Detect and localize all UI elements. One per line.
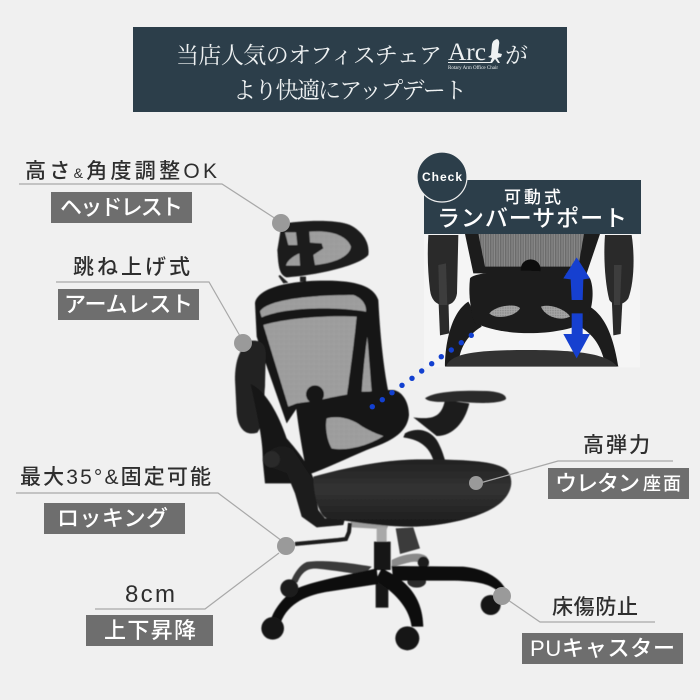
lumbar support xyxy=(296,390,409,475)
title banner: Rotary Arm Office Chair xyxy=(448,64,498,71)
backrest xyxy=(235,221,506,483)
callout: armrest: 跳ね上げ式 xyxy=(73,256,190,279)
callout: seat: 座面 xyxy=(643,474,681,494)
marker: seat xyxy=(469,476,483,490)
callout: height adjust xyxy=(86,581,213,646)
callout: seat: ウレタン xyxy=(555,471,640,496)
panel: lumbar support heading: 可動式 xyxy=(504,188,561,207)
title banner: が xyxy=(505,43,528,68)
panel: lumbar support heading: ランバーサポート xyxy=(437,205,627,231)
callout: height adjust: 上下昇降 xyxy=(104,618,196,643)
callout: armrest: アームレスト xyxy=(64,292,193,317)
chair photo xyxy=(235,221,511,650)
callout: height adjust: 8cm xyxy=(125,581,175,608)
callout: seat: 高弾力 xyxy=(583,434,650,457)
leader line: headrest xyxy=(19,184,276,219)
chair base xyxy=(261,521,505,650)
icon: double arrow xyxy=(563,257,590,358)
seat xyxy=(263,446,511,527)
badge: check: Check xyxy=(422,170,462,184)
title banner xyxy=(133,27,567,112)
marker: caster xyxy=(493,587,511,605)
callout: caster xyxy=(522,596,683,664)
leader line: armrest xyxy=(56,282,240,336)
locking lever xyxy=(295,523,350,544)
title banner: 当店人気のオフィスチェア xyxy=(176,43,442,68)
dotted connector xyxy=(370,333,474,409)
callout: caster: PUキャスター xyxy=(530,636,675,661)
marker: locking xyxy=(277,537,295,555)
callout: seat xyxy=(548,434,689,499)
leader line: caster xyxy=(508,600,655,622)
callout: armrest xyxy=(58,256,199,320)
badge: check xyxy=(417,152,467,202)
panel: lumbar support heading xyxy=(424,180,641,234)
inset: lumbar support photo xyxy=(424,234,640,367)
leader line: seat xyxy=(480,461,673,483)
callout: headrest: 高さ&角度調整OK xyxy=(25,160,217,183)
callout: headrest: ヘッドレスト xyxy=(60,195,183,220)
title banner: Arc xyxy=(448,39,486,66)
right armrest xyxy=(403,430,445,460)
callout: locking: 最大35°&固定可能 xyxy=(20,466,211,489)
marker: armrest xyxy=(234,334,252,352)
headrest xyxy=(277,221,369,277)
marker: headrest xyxy=(272,214,290,232)
callout: locking xyxy=(20,466,211,534)
callout: locking: ロッキング xyxy=(57,506,168,531)
title banner: より快適にアップデート xyxy=(233,78,467,103)
callout: caster: 床傷防止 xyxy=(552,596,638,619)
left armrest xyxy=(235,341,266,434)
leader line: locking xyxy=(16,493,282,541)
callout: headrest xyxy=(25,160,217,223)
leader line: height xyxy=(95,553,279,609)
